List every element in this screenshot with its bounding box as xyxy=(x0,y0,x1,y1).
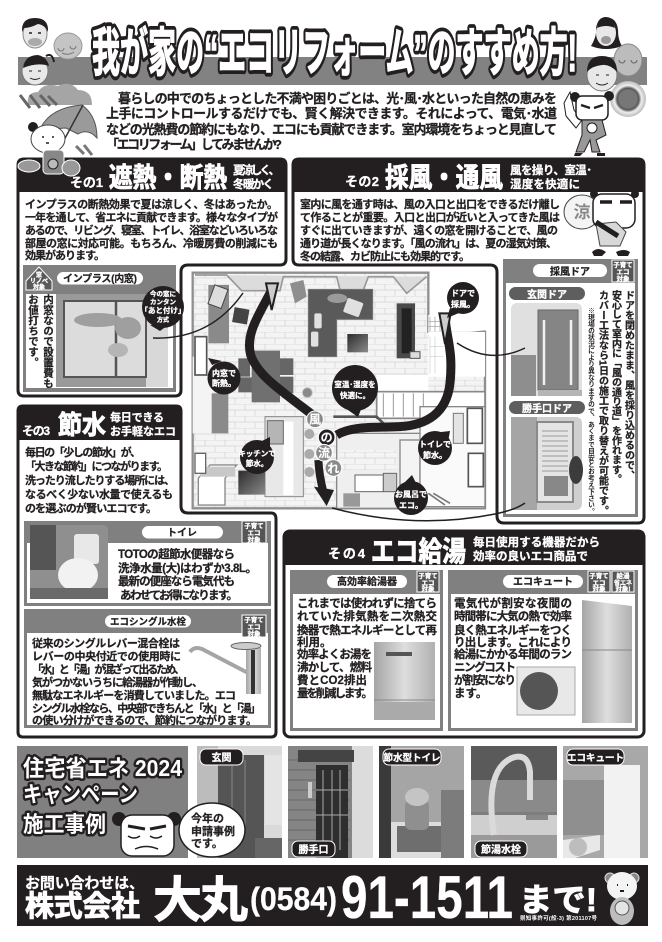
panel: EcoCute xyxy=(448,570,638,731)
badge: 対象 xyxy=(248,629,261,638)
callout: this year's applications xyxy=(179,803,245,857)
photo: faucet xyxy=(190,642,261,694)
icon: mascot with fan xyxy=(564,190,639,256)
vertical text xyxy=(27,293,54,388)
callout: bath eco: お風呂で xyxy=(395,490,427,499)
badge: 対象 xyxy=(248,535,261,544)
panel: case study heading: キャンペーン xyxy=(23,782,138,807)
label pill: トイレ xyxy=(167,527,197,539)
title band xyxy=(18,57,647,85)
panel: section 2 ventilation xyxy=(293,158,645,523)
icon: panda face xyxy=(112,812,181,856)
vertical text: 内窓なので設置費も xyxy=(42,293,54,388)
panel: case study heading: 住宅省エネ 2024 xyxy=(23,755,182,781)
label: wind flow xyxy=(307,411,342,476)
heater text xyxy=(297,596,438,700)
badge: 対象! xyxy=(615,584,631,593)
section 3 heading: 節水 xyxy=(58,410,106,440)
badge: window renovation: 対象 xyxy=(33,283,45,291)
icons: family faces, left xyxy=(22,18,82,85)
heater text: 量を削減します。 xyxy=(297,686,373,700)
section 2 body text: すぐに出ていきますが、遠くの窓を開けることで、風の xyxy=(300,223,558,237)
section 1 body text: 一年を通して、省エネに貢献できます。様々なタイプが xyxy=(25,210,278,224)
section 1 body text: あるので、リビング、寝室、トイレ、浴室などいろいろな xyxy=(25,223,278,237)
section 2 body text: 冬の結露、カビ防止にも効果的です。 xyxy=(300,249,470,263)
contact bar: お問い合わせは、 xyxy=(25,875,144,892)
label pill xyxy=(533,264,607,278)
label: entrance door: 玄関ドア xyxy=(527,288,567,301)
badge: 対象 xyxy=(422,584,435,593)
callout: retrofit: 方式 xyxy=(157,316,169,324)
EcoCute text: ます。 xyxy=(454,687,487,700)
badge: エコ xyxy=(422,579,434,587)
label: 節湯水栓 xyxy=(481,843,521,856)
callout: bath eco xyxy=(394,475,428,515)
label pill: エコシングル水栓 xyxy=(110,616,186,628)
contact bar: 県知事許可(般-3) 第201107号 xyxy=(520,914,597,922)
toilet text: 最新の便座なら電気代も xyxy=(118,574,235,588)
photo: entrance door xyxy=(511,303,582,396)
section 3 body text: 毎日の「少しの節水」が、 xyxy=(25,445,141,459)
panel: section 4 eco hot water xyxy=(283,530,645,737)
section 1 heading: 遮熱・断熱 xyxy=(109,163,227,193)
callout: this year's applications: 申請事例 xyxy=(191,824,235,838)
label pill: エコキュート xyxy=(513,577,573,588)
connector lines xyxy=(153,293,525,521)
vertical text: お値打ちです。 xyxy=(27,294,39,368)
section 4 heading xyxy=(283,530,645,567)
callout: door ventilation xyxy=(447,282,479,318)
EcoCute text: が割安になり xyxy=(454,673,516,687)
label: エコキュート xyxy=(567,753,624,764)
heater text: 利用。 xyxy=(297,635,332,649)
icons: family faces, right xyxy=(587,17,642,91)
label: wind flow: 流 xyxy=(318,445,330,460)
label: entrance door xyxy=(509,287,585,301)
EcoCute text: り出します。これにより xyxy=(454,636,572,649)
section 1 body text: 部屋の窓に対応可能。もちろん、冷暖房費の削減にも xyxy=(25,236,278,250)
badge: 対象 xyxy=(592,584,606,593)
vertical text xyxy=(586,289,634,516)
floor plan illustration xyxy=(193,273,485,508)
intro text xyxy=(106,91,557,152)
label pill: 採風ドア xyxy=(550,265,590,278)
section 3 body text: のを選ぶのが賢いエコです。 xyxy=(25,501,157,515)
section 1 heading: その1 xyxy=(70,175,103,190)
heater text: 換器で熱エネルギーとして再 xyxy=(297,623,438,637)
callout: retrofit: カンタン xyxy=(150,297,176,306)
heater text: 効率よくお湯を xyxy=(297,647,372,661)
label: back door: 勝手口ドア xyxy=(522,402,572,415)
label: 勝手口 xyxy=(298,843,328,856)
toilet text xyxy=(118,547,257,602)
panel: section 3 water saving xyxy=(17,405,276,737)
heater text: 費とCO2排出 xyxy=(297,673,367,687)
callout: comfortable temperature and humidity xyxy=(332,365,378,417)
section 1 body text xyxy=(25,197,278,262)
section 2 body text xyxy=(300,197,560,263)
callout: bath eco: エコ。 xyxy=(399,501,423,510)
badge: 給湯 xyxy=(616,571,630,580)
section 3 body text xyxy=(25,445,175,515)
contact bar: (0584) xyxy=(250,881,337,917)
label pill xyxy=(327,575,407,588)
photo: window xyxy=(56,294,168,387)
arrow: wind flow from window xyxy=(249,283,315,417)
callout: toilet water saving xyxy=(418,431,452,465)
contact bar: 大丸 xyxy=(153,874,248,928)
EcoCute text: 良く熱エネルギーをつく xyxy=(454,623,572,637)
callout: toilet water saving: 節水。 xyxy=(423,450,447,460)
icon: pointing mascot xyxy=(564,91,614,156)
toilet text: あわせてお得になります。 xyxy=(120,588,238,602)
photo: EcoCute installation xyxy=(563,746,648,858)
kitchen xyxy=(195,417,314,505)
callout: retrofit: 「あと付け」 xyxy=(140,305,186,315)
callout: comfortable temperature and humidity: 室温･湿度を xyxy=(334,379,376,389)
section 1 heading: 夏涼しく、 xyxy=(233,163,280,177)
label: wind flow: の xyxy=(321,431,333,445)
arrow: wind flow from door xyxy=(337,313,451,435)
callout: toilet water saving: トイレで xyxy=(419,440,451,449)
photo: toilet xyxy=(30,525,108,599)
contact bar xyxy=(17,864,648,931)
badge: エコ xyxy=(248,529,260,537)
callout: this year's applications: 今年の xyxy=(191,811,224,825)
section 2 body text: 室内に風を通す時は、風の入口と出口をできるだけ離し xyxy=(300,197,560,211)
label: wind flow: れ xyxy=(327,461,339,475)
faucet text: 従来のシングルレバー混合栓は xyxy=(32,636,180,650)
label pill: インプラス(内窓) xyxy=(63,272,137,285)
badge: 子育て xyxy=(244,615,264,624)
label: wind flow: 風 xyxy=(309,413,321,427)
callout: this year's applications: です。 xyxy=(191,837,223,850)
intro text: 「エコリフォーム」してみませんか? xyxy=(106,137,282,152)
section 3 body text: 洗ったり流したりする場所には、 xyxy=(25,473,175,487)
badge: 子育て xyxy=(589,571,609,580)
section 2 heading: 風を操り、室温･ xyxy=(510,163,592,177)
callout: retrofit: 今の窓に xyxy=(150,289,176,298)
badge xyxy=(588,571,610,593)
dining set xyxy=(238,351,312,402)
faucet text: 気がつかないうちに給湯器が作動し、 xyxy=(32,675,203,689)
arrow: wind flow exit xyxy=(314,460,334,506)
badge: エコ xyxy=(248,623,260,631)
intro text: などの光熱費の節約にもなり、エコにも貢献できます。室内環境をちょっと見直して xyxy=(106,122,557,137)
badge xyxy=(242,615,266,638)
icon: sun xyxy=(610,81,646,117)
badge: 対象 xyxy=(616,274,630,283)
callout: kitchen water saving xyxy=(238,437,276,474)
badge: window renovation: リノベ xyxy=(30,278,48,285)
callout: inner window insulation: 内窓で xyxy=(212,368,236,378)
panel: ventilation door xyxy=(503,259,638,517)
heater text: 沸かして、燃料 xyxy=(297,660,372,674)
section 3 heading: 毎日できる xyxy=(110,410,164,424)
contact bar: 株式会社 xyxy=(25,890,140,923)
vertical text: カバー工法なら1日の施工で取り替えが可能です。 xyxy=(596,290,608,516)
section 3 heading: お手軽なエコ xyxy=(110,424,176,438)
section 3 body text: 「大きな節約」につながります。 xyxy=(25,459,168,473)
faucet text: の使い分けができるので、節約につながります。 xyxy=(32,713,257,727)
badge: window renovation: 窓 xyxy=(36,271,42,279)
section 2 heading: その2 xyxy=(345,174,379,189)
callout: inner window insulation xyxy=(208,358,240,394)
EcoCute text: 時間帯に大気の熱で効率 xyxy=(454,609,572,623)
badge: エコ xyxy=(616,268,630,276)
callout: door ventilation: ドアで xyxy=(451,289,475,298)
callout: door ventilation: 採風。 xyxy=(451,299,475,309)
sofa and table xyxy=(308,289,373,357)
section 1 heading: 冬暖かく xyxy=(233,177,274,191)
faucet text: シングル水栓なら、中央部できちんと「水」と「湯」 xyxy=(32,701,261,715)
badge: 子育て xyxy=(613,260,633,269)
faucet text xyxy=(32,636,261,727)
EcoCute text: 給湯にかかる年間のラン xyxy=(454,647,572,661)
callout: kitchen water saving: 節水。 xyxy=(246,458,268,468)
icon: rain cloud and umbrella xyxy=(20,84,97,155)
photo: hot water saving faucet xyxy=(471,746,557,858)
faucet text: 「水」と「湯」が混ざって出るため、 xyxy=(32,662,185,676)
plan floor and walls xyxy=(193,273,485,508)
faucet text: 無駄なエネルギーを消費していました。エコ xyxy=(32,688,236,702)
vertical text: ドアを閉めたまま、風を採り込めるので、 xyxy=(622,290,634,480)
section 4 heading: 毎日使用する機器だから xyxy=(473,535,600,549)
contact bar: 91-1511 xyxy=(341,864,513,931)
EcoCute text: 電気代が割安な夜間の xyxy=(454,596,572,610)
panel: case study heading xyxy=(17,746,188,858)
icon: mascot with fan: 涼 xyxy=(574,203,590,222)
section 4 heading: その4 xyxy=(328,546,366,561)
badge: エコ xyxy=(592,579,606,587)
badge: 子育て xyxy=(244,521,264,530)
toilet text: TOTOの超節水便器なら xyxy=(118,547,235,561)
label pill xyxy=(142,526,223,539)
section 4 heading: エコ給湯 xyxy=(371,536,466,567)
section 2 heading: 採風・通風 xyxy=(385,163,503,193)
label pill xyxy=(503,575,583,588)
photo: back door xyxy=(511,417,583,510)
badge: 子育て xyxy=(418,571,438,580)
callout: retrofit xyxy=(140,286,186,331)
contact bar: まで! xyxy=(519,882,597,918)
badge xyxy=(612,260,634,283)
icon: bear mascot body xyxy=(18,150,80,176)
section 2 body text: 通り道が長くなります。「風の流れ」は、夏の湿気対策、 xyxy=(300,236,557,250)
right rooms xyxy=(333,315,485,508)
intro text: 上手にコントロールするだけでも、賢く解決できます。それによって、電気･水道 xyxy=(106,106,557,121)
panel: inner window xyxy=(23,265,186,392)
badge xyxy=(417,571,439,593)
panel: section 1 shading and insulation xyxy=(17,150,287,396)
section 4 heading: 効率の良いエコ商品で xyxy=(473,549,588,563)
section 3 heading: その3 xyxy=(22,424,50,438)
vertical text: 安心して室内に「風の通り道」を作れます。 xyxy=(610,289,622,484)
EcoCute text: ニングコスト xyxy=(454,660,516,674)
photo: back door xyxy=(288,746,373,858)
photo: entrance xyxy=(197,746,282,858)
section 1 heading xyxy=(17,158,287,193)
TV unit xyxy=(397,303,420,358)
EcoCute text xyxy=(454,596,572,700)
heater text: これまでは使われずに捨てら xyxy=(297,596,437,610)
badge: 省エネ xyxy=(614,579,632,587)
callout: inner window insulation: 断熱。 xyxy=(212,378,236,388)
label: 節水型トイレ xyxy=(383,752,441,764)
faucet text: レバーの中央付近での使用時に xyxy=(32,649,181,663)
photo: water saving toilet xyxy=(379,746,464,858)
badge: window renovation xyxy=(26,267,52,291)
callout: comfortable temperature and humidity: 快適に。 xyxy=(340,390,370,400)
panel: case study heading: 施工事例 xyxy=(23,812,106,837)
panel: toilet xyxy=(24,521,271,606)
panel: high efficiency water heater xyxy=(290,570,443,731)
icon: bear mascot xyxy=(605,872,639,925)
callout: kitchen water saving: キッチンで xyxy=(238,449,276,458)
photo: EcoCute units xyxy=(517,600,632,723)
photo: water heater xyxy=(374,642,435,720)
label pill: 高効率給湯器 xyxy=(337,575,397,588)
section 1 body text: インプラスの断熱効果で夏は涼しく、冬はあったか。 xyxy=(25,197,278,211)
section 2 body text: て作ることが重要。入口と出口が近いと入ってきた風は xyxy=(300,210,560,224)
label: 玄関 xyxy=(212,751,232,764)
toilet text: 洗浄水量(大)はわずか3.8L。 xyxy=(118,561,257,575)
badge xyxy=(612,571,634,593)
section 3 heading xyxy=(17,405,182,440)
panel: eco single faucet xyxy=(24,609,271,728)
section 3 body text: なるべく少ない水量で使えるも xyxy=(25,487,173,501)
section 2 heading xyxy=(293,158,645,193)
badge xyxy=(242,521,266,544)
label: back door xyxy=(509,401,585,415)
section 2 heading: 湿度を快適に xyxy=(510,177,580,191)
heater text: れていた排気熱を二次熱交 xyxy=(297,609,438,623)
section 1 body text: 効果があります。 xyxy=(25,248,105,262)
intro text: 暮らしの中でのちょっとした不満や困りごとは、光･風･水といった自然の恵みを xyxy=(118,91,557,106)
vertical text: ※現場の状況により異なりますので、あくまで目安とお考え下さい。 xyxy=(586,307,595,515)
